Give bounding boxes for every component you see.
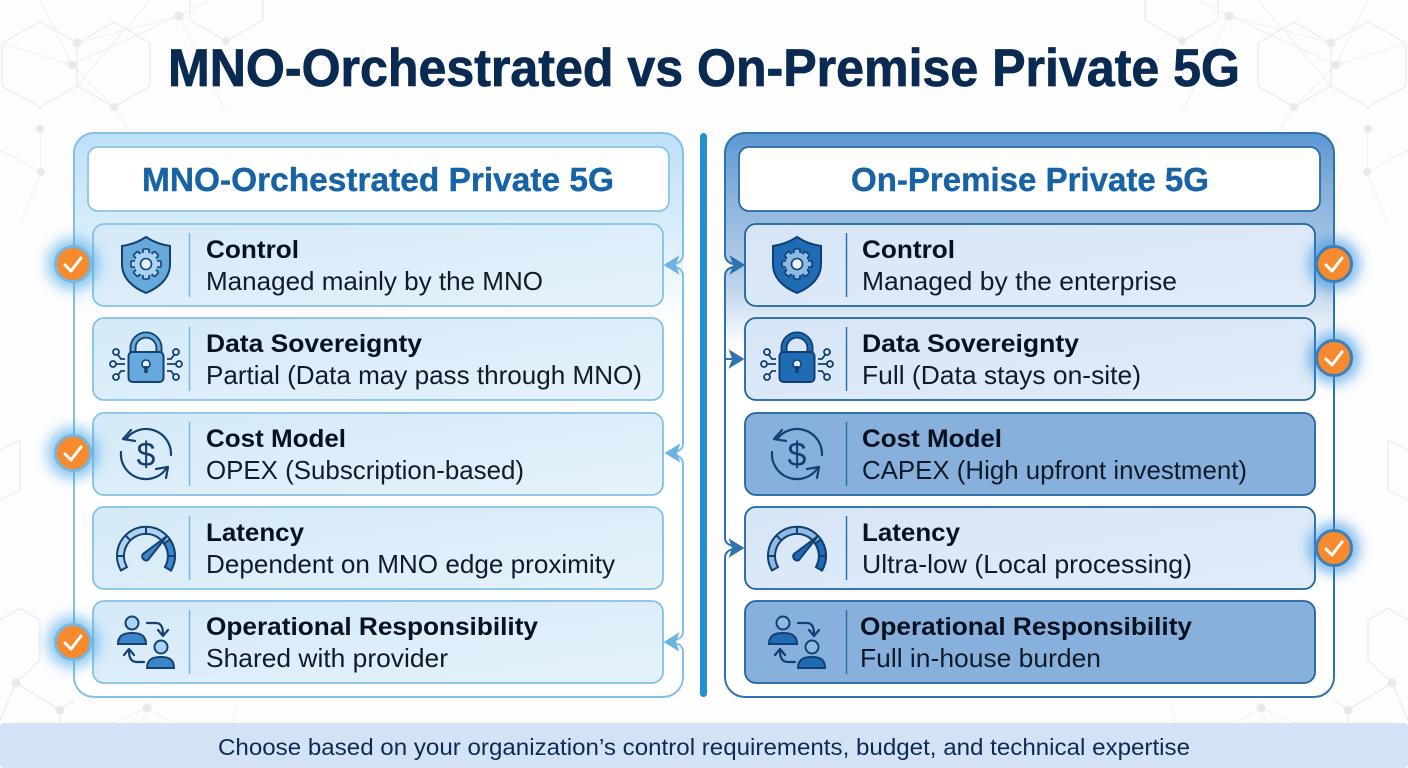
panel heading: MNO-Orchestrated Private 5G bbox=[142, 161, 614, 198]
check badge: cost model bbox=[47, 427, 99, 479]
text: operational responsibility: Shared with provider bbox=[206, 643, 448, 673]
icon: speed gauge bbox=[117, 527, 175, 570]
text: data sovereignty: Data Sovereignty bbox=[206, 330, 422, 358]
text: data sovereignty bbox=[862, 330, 1141, 390]
text: operational responsibility: Operational Responsibility bbox=[206, 613, 538, 641]
row: cost model bbox=[745, 413, 1315, 495]
row: latency bbox=[745, 507, 1315, 589]
icon: padlock with circuit bbox=[110, 335, 182, 382]
text: cost model: OPEX (Subscription-based) bbox=[206, 455, 524, 485]
text: latency bbox=[862, 519, 1192, 579]
text: operational responsibility: Full in-house burden bbox=[860, 643, 1101, 673]
text: control: Managed by the enterprise bbox=[862, 266, 1177, 296]
row: operational responsibility bbox=[745, 601, 1315, 683]
footer banner: Choose based on your organization’s control requirements, budget, and technical expertise bbox=[218, 734, 1190, 760]
panel heading bbox=[739, 147, 1320, 211]
panel background bbox=[74, 133, 683, 697]
text: latency: Latency bbox=[206, 519, 304, 547]
text: operational responsibility bbox=[206, 613, 538, 673]
text: data sovereignty bbox=[206, 330, 642, 390]
panel heading bbox=[88, 147, 669, 211]
text: control: Managed mainly by the MNO bbox=[206, 266, 543, 296]
text: latency: Ultra-low (Local processing) bbox=[862, 549, 1192, 579]
panel border with arrows bbox=[725, 133, 1334, 697]
row: control bbox=[93, 224, 663, 306]
row: cost model bbox=[93, 413, 663, 495]
text: cost model bbox=[862, 425, 1247, 485]
text: operational responsibility bbox=[860, 613, 1192, 673]
check badge: data sovereignty bbox=[1308, 332, 1360, 384]
text: cost model: CAPEX (High upfront investment) bbox=[862, 455, 1247, 485]
text: latency: Dependent on MNO edge proximity bbox=[206, 549, 615, 579]
text: cost model: Cost Model bbox=[862, 425, 1002, 453]
check badge: control bbox=[47, 238, 99, 290]
row: data sovereignty bbox=[93, 318, 663, 400]
icon: shield with gear bbox=[122, 237, 170, 293]
text: cost model: Cost Model bbox=[206, 425, 346, 453]
text: operational responsibility: Operational Responsibility bbox=[860, 613, 1192, 641]
panel: On-Premise Private 5G bbox=[725, 133, 1360, 697]
text: control: Control bbox=[206, 236, 299, 264]
panel border with arrows bbox=[74, 133, 683, 697]
icon: people exchange bbox=[118, 616, 174, 668]
panel heading: On-Premise Private 5G bbox=[851, 161, 1209, 198]
row: control bbox=[745, 224, 1315, 306]
icon: padlock with circuit bbox=[761, 335, 833, 382]
icon: dollar cycle bbox=[772, 429, 822, 479]
icon: speed gauge bbox=[768, 527, 826, 570]
text: control: Control bbox=[862, 236, 955, 264]
text: data sovereignty: Full (Data stays on-site) bbox=[862, 360, 1141, 390]
title: MNO-Orchestrated vs On-Premise Private 5G bbox=[168, 39, 1240, 98]
text: latency: Latency bbox=[862, 519, 960, 547]
text: cost model bbox=[206, 425, 524, 485]
footer banner bbox=[0, 723, 1408, 768]
icon: shield with gear bbox=[773, 237, 821, 293]
row: data sovereignty bbox=[745, 318, 1315, 400]
text: data sovereignty: Partial (Data may pass through MNO) bbox=[206, 360, 642, 390]
center divider bbox=[700, 133, 707, 697]
text: control bbox=[862, 236, 1177, 296]
icon: dollar cycle bbox=[121, 429, 171, 479]
panel: MNO-Orchestrated Private 5G bbox=[47, 133, 683, 697]
icon: people exchange bbox=[769, 616, 825, 668]
text: latency bbox=[206, 519, 615, 579]
check badge: control bbox=[1308, 238, 1360, 290]
panel background bbox=[725, 133, 1334, 697]
text: control bbox=[206, 236, 543, 296]
text: data sovereignty: Data Sovereignty bbox=[862, 330, 1079, 358]
check badge: latency bbox=[1308, 522, 1360, 574]
row: operational responsibility bbox=[93, 601, 663, 683]
check badge: operational responsibility bbox=[47, 616, 99, 668]
row: latency bbox=[93, 507, 663, 589]
